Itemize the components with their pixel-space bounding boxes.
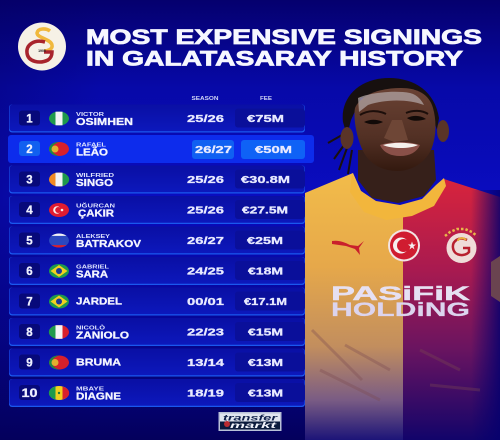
nose	[384, 120, 408, 142]
row 2 highlighted: RAFAEL	[76, 142, 107, 148]
row 3	[9, 166, 305, 194]
row 2 highlighted: LEÃO	[76, 148, 108, 158]
row 6: €18M	[248, 266, 283, 278]
row 1: OSIMHEN	[76, 117, 133, 128]
ears	[340, 127, 354, 149]
hair	[343, 78, 439, 136]
eyes	[364, 116, 426, 124]
row 2 highlighted: 2	[26, 144, 33, 156]
flag: Italy	[49, 325, 69, 339]
row 4	[9, 196, 305, 224]
title: MOST EXPENSIVE SIGNINGS	[86, 25, 482, 49]
transfermarkt logo: markt	[230, 421, 277, 430]
row 5: ALEKSEY	[76, 234, 110, 240]
jersey left yellow	[305, 173, 403, 440]
row 10: 18/19	[187, 388, 224, 400]
row 9: 13/14	[187, 357, 224, 369]
row 9: BRUMA	[76, 358, 121, 368]
row 1: 1	[26, 114, 33, 126]
flag: Portugal	[49, 142, 69, 156]
row 10: €13M	[248, 388, 283, 400]
collar	[350, 173, 446, 220]
row 8: NICOLÒ	[76, 324, 106, 332]
row 10: 10	[22, 388, 38, 400]
flag: Ivory Coast	[49, 172, 69, 186]
row 1	[9, 104, 305, 132]
face	[354, 88, 435, 171]
row 6: SARA	[76, 270, 108, 280]
row 1: €75M	[247, 113, 284, 125]
jersey crest	[445, 229, 477, 263]
row 7: 00/01	[187, 296, 224, 308]
player photo	[305, 78, 500, 440]
row 3: €30.8M	[241, 174, 290, 186]
row 9: 9	[26, 358, 33, 370]
row 9	[9, 348, 305, 376]
row 8: €15M	[248, 326, 283, 338]
row 2 highlighted: 26/27	[195, 144, 232, 156]
flag: Portugal	[49, 356, 69, 370]
column headers: FEE	[260, 96, 273, 102]
row 10	[9, 379, 305, 407]
row 1: 25/26	[187, 113, 224, 125]
row 2 highlighted	[8, 135, 314, 163]
wrinkles	[312, 330, 480, 400]
row 6: 6	[26, 266, 33, 278]
row 4: ÇAKIR	[78, 208, 114, 220]
title	[86, 25, 482, 70]
puma logo	[332, 241, 364, 255]
row 4: UĞURCAN	[76, 202, 115, 210]
row 5	[9, 226, 305, 254]
row 6: GABRIEL	[76, 264, 110, 270]
row 5: BATRAKOV	[76, 239, 142, 250]
forehead highlight	[358, 92, 424, 112]
jersey fade	[403, 190, 500, 440]
club crest	[18, 22, 66, 70]
row 4: 25/26	[187, 204, 224, 216]
column headers	[192, 96, 273, 102]
row 3: 3	[26, 174, 33, 186]
row 8: 8	[26, 327, 33, 339]
row 7	[9, 288, 305, 316]
row 2 highlighted: €50M	[255, 144, 292, 156]
transfermarkt logo	[218, 412, 282, 431]
sponsor: PASiFiK	[331, 284, 471, 305]
column headers: SEASON	[192, 96, 219, 102]
row 4: 4	[26, 205, 33, 217]
row 8	[9, 318, 305, 346]
row 10: MBAYE	[76, 386, 104, 392]
row 5: €25M	[247, 235, 283, 247]
sponsor: HOLDiNG	[331, 300, 470, 321]
row 6	[9, 257, 305, 285]
flag: Turkey	[49, 203, 69, 217]
row 3: 25/26	[187, 174, 224, 186]
row 8: 22/23	[187, 326, 224, 338]
row 7: JARDEL	[76, 296, 122, 308]
turkish flag badge	[388, 230, 420, 262]
row 7: 7	[26, 296, 33, 308]
row 4: €27.5M	[242, 204, 288, 216]
club crest: 1905	[38, 49, 46, 53]
jersey right red	[403, 179, 500, 440]
row 3: WILFRIED	[76, 173, 114, 179]
flag: Nigeria	[49, 112, 69, 126]
sponsor	[331, 284, 471, 321]
brows	[360, 111, 428, 115]
mouth	[380, 142, 420, 156]
transfermarkt logo: transfer	[223, 414, 279, 422]
arm	[491, 256, 500, 302]
neck	[358, 150, 436, 203]
row 10: DIAGNE	[76, 392, 122, 402]
row 3: SINGO	[76, 178, 113, 189]
title: IN GALATASARAY HISTORY	[86, 46, 463, 70]
row 6: 24/25	[187, 266, 224, 278]
row 7: €17.1M	[244, 296, 287, 308]
row 5: 26/27	[187, 235, 224, 247]
flag: Senegal	[49, 386, 69, 400]
row 1: VICTOR	[76, 112, 105, 118]
row 9: €13M	[248, 357, 283, 369]
row 8: ZANIOLO	[76, 330, 129, 342]
row 5: 5	[26, 236, 33, 248]
hair dreads	[328, 135, 352, 174]
flag: Brazil	[49, 294, 69, 308]
flag: Brazil	[49, 264, 69, 278]
flag: Russia	[49, 234, 69, 248]
